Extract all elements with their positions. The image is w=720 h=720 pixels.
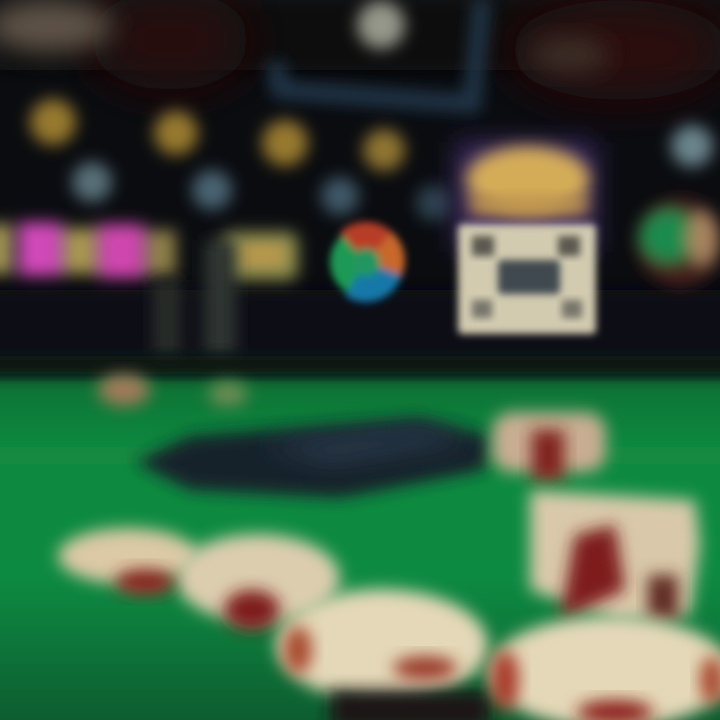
lamp top left bbox=[0, 0, 112, 52]
chip bottom centre bbox=[276, 589, 490, 720]
dark tablet on table bbox=[135, 418, 490, 498]
pink and yellow light strip bbox=[0, 222, 176, 278]
blue frame with ceiling light bbox=[275, 0, 482, 104]
yellow-green sign bbox=[222, 232, 298, 280]
chip stack back right bbox=[492, 412, 606, 480]
green felt table bbox=[0, 356, 720, 720]
banner with purple glow and yellow top bbox=[456, 142, 596, 334]
standing figure silhouettes bbox=[154, 240, 236, 356]
small distant chips bbox=[98, 374, 248, 406]
chip stack right bbox=[530, 490, 700, 620]
chips left pile bbox=[58, 528, 340, 630]
right wheel bbox=[636, 198, 720, 286]
row of yellow lights bbox=[30, 99, 405, 171]
chip bottom right bbox=[488, 616, 720, 720]
top right sign bbox=[530, 39, 610, 71]
row of pale blue lights bbox=[72, 125, 713, 221]
multicolour wheel bbox=[330, 222, 405, 302]
